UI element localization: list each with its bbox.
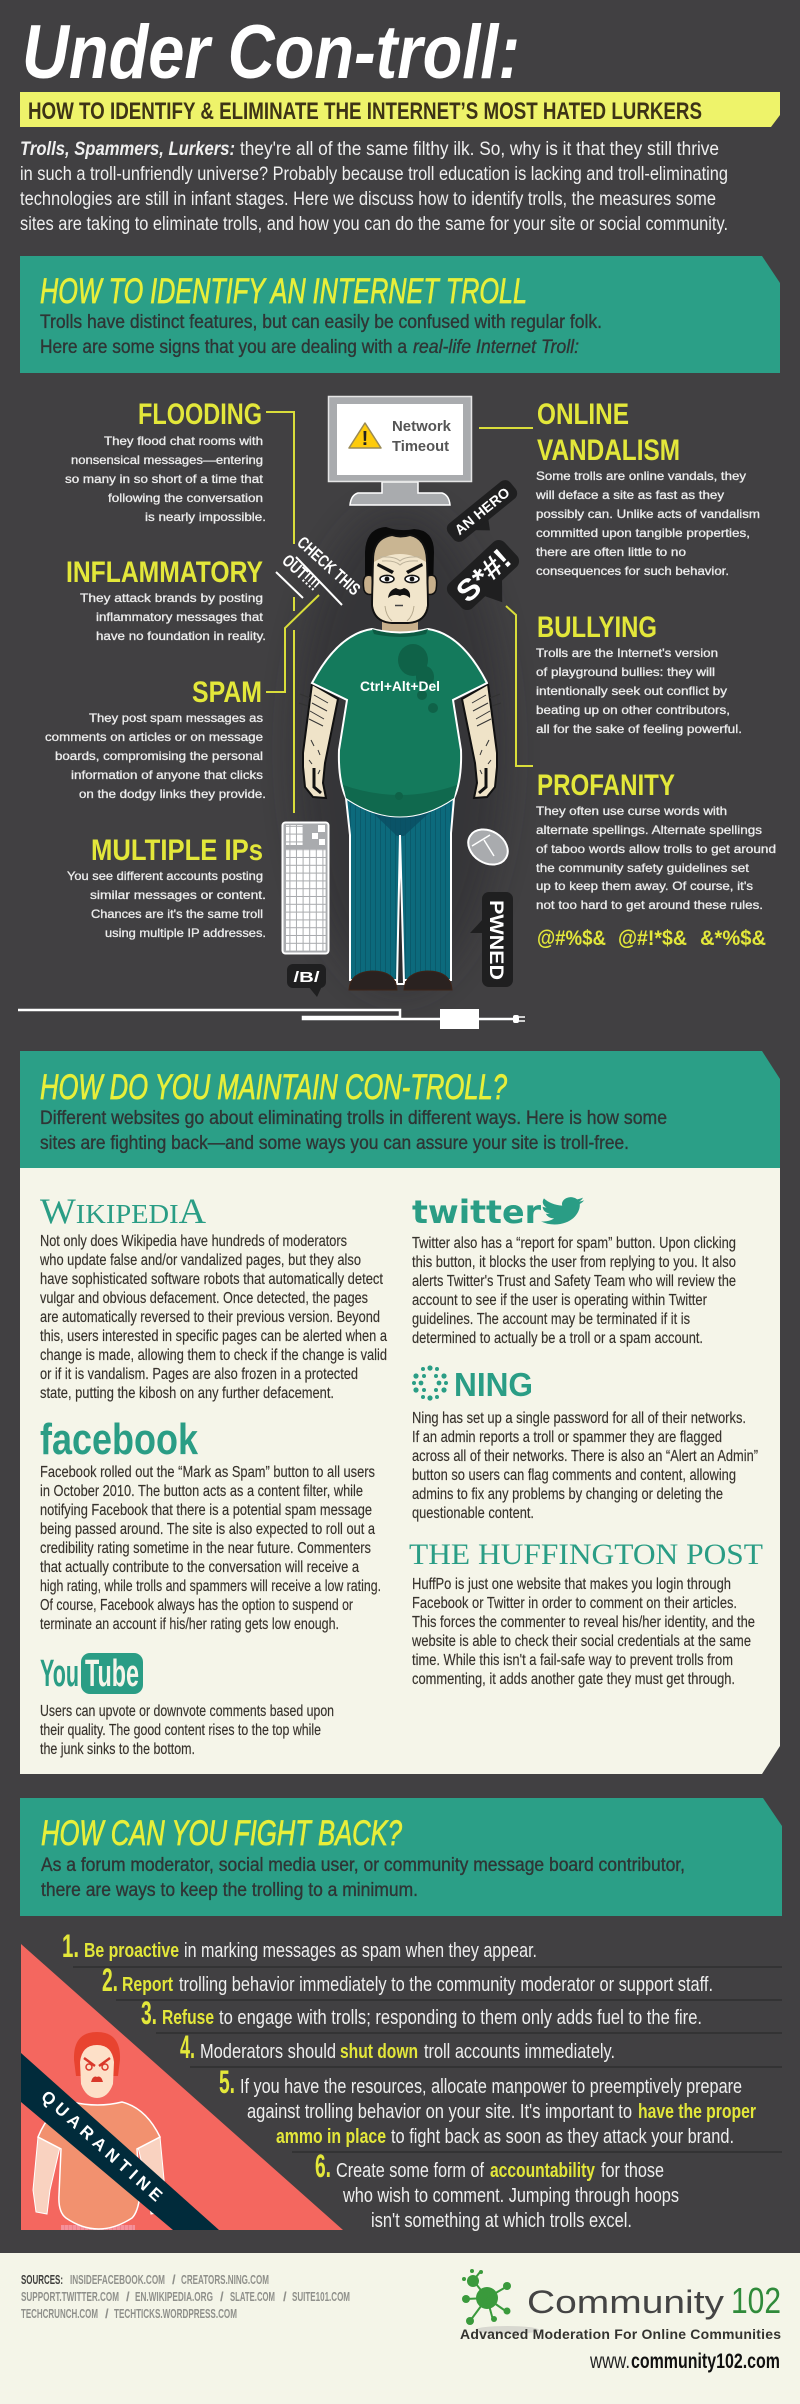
maintain intro text: [40, 1108, 667, 1154]
tip 6: Create some form of: [336, 2160, 484, 2182]
intro paragraph: they're all of the same filthy ilk. So, why is it that they still thrive: [240, 139, 719, 160]
block: youtube: the junk sinks to the bottom.: [40, 1741, 195, 1758]
icon: mouse: [462, 822, 514, 872]
quarantine band: [21, 2053, 219, 2230]
block: ning: NING: [454, 1366, 533, 1403]
sign: spam: on the dodgy links they provide.: [79, 787, 266, 801]
sign: profanity: @#%$&: [537, 927, 606, 950]
icon: monitor: Timeout: [392, 438, 449, 455]
block: wikipedia: state, putting the kibosh on any further defacement.: [40, 1385, 334, 1402]
tip 5: ammo in place: [276, 2126, 386, 2148]
block: huffington post: HuffPo is just one website that makes you login through: [412, 1576, 731, 1593]
tip 6: 6.: [315, 2148, 331, 2184]
fight back intro text: [41, 1855, 685, 1901]
block: ning: questionable content.: [412, 1505, 534, 1522]
sign: inflammatory: inflammatory messages that: [96, 610, 264, 624]
icon: mouse cable and adapter: [18, 1009, 525, 1029]
panel: footer: [0, 2253, 800, 2404]
identify intro text: Trolls have distinct features, but can easily be confused with regular folk.: [40, 312, 602, 333]
sign: bullying: BULLYING: [537, 611, 657, 644]
sign: multiple IPs: using multiple IP addresses.: [105, 926, 266, 940]
tip 2: Report: [122, 1974, 173, 1996]
sources: TECHTICKS.WORDPRESS.COM: [114, 2306, 237, 2321]
sign: spam: [45, 676, 266, 801]
panel: site approaches: [20, 1168, 780, 1774]
icon: warning triangle: !: [362, 428, 368, 450]
block: huffington post: time. While this isn't a fail-safe way to prevent trolls from: [412, 1652, 733, 1669]
sign: inflammatory: have no foundation in reality.: [96, 629, 266, 643]
sign: bullying: intentionally seek out conflict by: [536, 684, 727, 698]
block: facebook: Of course, Facebook always has the option to suspend or: [40, 1597, 354, 1614]
block: facebook: Facebook rolled out the “Mark as Spam” button to all users: [40, 1464, 375, 1481]
sign: flooding: FLOODING: [138, 398, 262, 431]
block: twitter: account to see if the user is operating within Twitter: [412, 1292, 708, 1309]
shirt stains: [395, 644, 438, 800]
bubble: check this out: OUT!!!!: [278, 551, 324, 594]
bubble: S*#!: [444, 537, 533, 625]
sign: inflammatory: INFLAMMATORY: [66, 556, 263, 589]
sources: /: [105, 2306, 109, 2321]
community 102 logo: [460, 2269, 781, 2342]
troll head: [363, 527, 437, 623]
heading: fight back: HOW CAN YOU FIGHT BACK?: [41, 1814, 402, 1853]
sign: profanity: [536, 769, 776, 950]
community 102 logo: Advanced Moderation For Online Communities: [460, 2326, 781, 2342]
heading: identify: HOW TO IDENTIFY AN INTERNET TROLL: [40, 272, 527, 311]
bubble: S*#!: S*#!: [450, 543, 518, 609]
tip 5: against trolling behavior on your site. It's important to: [247, 2101, 632, 2123]
community 102 logo: 102: [731, 2280, 781, 2321]
block: wikipedia: Not only does Wikipedia have hundreds of moderators: [40, 1233, 347, 1250]
sources: SLATE.COM: [230, 2289, 275, 2304]
troll neck: [382, 618, 418, 634]
tip 3: to engage with trolls; responding to them only adds fuel to the fire.: [219, 2007, 702, 2029]
tip 4: [180, 2029, 782, 2067]
icon: green splat: [462, 2269, 539, 2334]
bubble: an hero: AN HERO: [451, 484, 513, 538]
sign: online vandalism: VANDALISM: [537, 434, 680, 467]
sign: bullying: beating up on other contributors,: [536, 703, 730, 717]
fight back intro text: As a forum moderator, social media user, or community message board contributor,: [41, 1855, 685, 1876]
tip 3: Refuse: [162, 2007, 214, 2029]
block: ning: admins to fix any problems by changing or deleting the: [412, 1486, 723, 1503]
sources: SUITE101.COM: [292, 2289, 350, 2304]
icon: monitor: [328, 396, 472, 505]
block: facebook: [40, 1415, 381, 1633]
sources: TECHCRUNCH.COM: [21, 2306, 98, 2321]
block: twitter: determined to actually be a troll or a spam account.: [412, 1330, 703, 1347]
identify intro text: Here are some signs that you are dealing with a: [40, 337, 407, 358]
sign: online vandalism: consequences for such behavior.: [536, 564, 729, 578]
block: facebook: high rating, while trolls and spammers will receive a low rating.: [40, 1578, 381, 1595]
website address: www.: [589, 2350, 630, 2373]
sign: multiple IPs: [67, 834, 266, 940]
sign: profanity: &*%$&: [700, 927, 766, 950]
sign: profanity: @#!*$&: [618, 927, 687, 950]
sources: /: [283, 2289, 287, 2304]
icon: twitter bird: [541, 1197, 584, 1224]
sign: profanity: alternate spellings. Alternate spellings: [536, 823, 762, 837]
tip 3: 3.: [141, 1995, 157, 2031]
quarantine label: QUARANTINE: [37, 2087, 166, 2205]
tip 2: 2.: [102, 1962, 118, 1998]
intro paragraph: [20, 139, 728, 235]
illustration: troll character: [299, 527, 501, 990]
sign: flooding: following the conversation: [108, 491, 263, 505]
tip 6: for those: [601, 2160, 664, 2182]
block: twitter: this button, it blocks the user from replying to you. It also: [412, 1254, 736, 1271]
icon: keyboard: [282, 822, 328, 954]
panel: fight back header: [20, 1798, 782, 1916]
tip 6: accountability: [490, 2160, 596, 2182]
troll shirt: [312, 629, 487, 816]
bubble: an hero: [444, 477, 526, 552]
tip 5: [219, 2064, 782, 2152]
sign: bullying: of playground bullies: they will: [536, 665, 715, 679]
icon: warning triangle: [349, 423, 381, 450]
community 102 logo: Community: [527, 2284, 724, 2320]
sign: profanity: PROFANITY: [537, 769, 675, 802]
sources: /: [126, 2289, 130, 2304]
sign: online vandalism: there are often little to no: [536, 545, 686, 559]
sign: multiple IPs: You see different accounts posting: [67, 869, 263, 883]
tip 2: [102, 1962, 782, 2000]
tip 5: 5.: [219, 2064, 235, 2100]
connector lines: [266, 412, 533, 813]
sign: online vandalism: will deface a site as fast as they: [535, 488, 724, 502]
block: wikipedia: are automatically reversed to their previous version. Beyond: [40, 1309, 380, 1326]
tip 1: Be proactive: [84, 1940, 179, 1962]
sources: SUPPORT.TWITTER.COM: [21, 2289, 119, 2304]
sources: EN.WIKIPEDIA.ORG: [135, 2289, 213, 2304]
sign: spam: information of anyone that clicks: [71, 768, 263, 782]
bubble: /B/: [287, 964, 326, 997]
block: twitter: [412, 1193, 736, 1347]
panel: how do you maintain header: [20, 1051, 780, 1168]
sources: /: [172, 2272, 176, 2287]
sign: flooding: is nearly impossible.: [145, 510, 266, 524]
tip 4: troll accounts immediately.: [424, 2041, 615, 2063]
sign: spam: They post spam messages as: [89, 711, 263, 725]
sign: multiple IPs: Chances are it's the same troll: [91, 907, 263, 921]
block: ning: [412, 1365, 758, 1522]
identify intro text: real-life Internet Troll:: [413, 337, 579, 358]
tip 4: 4.: [180, 2029, 195, 2065]
block: wikipedia: this, users interested in specific pages can be alerted when a: [40, 1328, 387, 1345]
identify intro text: [40, 312, 602, 358]
block: youtube: [40, 1653, 334, 1758]
tip 3: [141, 1995, 782, 2033]
sign: flooding: [65, 398, 266, 524]
block: wikipedia: [39, 1191, 387, 1402]
illustration: quarantine triangle: [21, 1944, 343, 2230]
sign: online vandalism: possibly can. Unlike acts of vandalism: [536, 507, 760, 521]
sign: profanity: not too hard to get around these rules.: [536, 898, 763, 912]
block: youtube: Users can upvote or downvote comments based upon: [40, 1703, 334, 1720]
block: facebook: facebook: [40, 1415, 198, 1464]
troll arms: [299, 684, 501, 798]
sign: multiple IPs: MULTIPLE IPs: [91, 834, 263, 867]
block: wikipedia: who update false and/or vandalized pages, but they also: [39, 1252, 361, 1269]
sign: online vandalism: [535, 398, 760, 578]
icon: ning dots: [412, 1365, 448, 1401]
maintain intro text: Different websites go about eliminating trolls in different ways. Here is how some: [40, 1108, 667, 1129]
sign: flooding: They flood chat rooms with: [104, 434, 263, 448]
block: facebook: notifying Facebook that there is a potential spam message: [40, 1502, 372, 1519]
tip 1: [62, 1928, 782, 1967]
sign: multiple IPs: similar messages or content.: [90, 888, 266, 902]
sign: inflammatory: [66, 556, 266, 643]
block: wikipedia: change is made, allowing them to check if the change is valid: [40, 1347, 387, 1364]
tip 4: Moderators should: [200, 2041, 336, 2063]
sign: spam: SPAM: [192, 676, 262, 709]
troll legs: [346, 798, 454, 990]
tip 6: [315, 2148, 679, 2232]
block: facebook: in October 2010. The button acts as a content filter, while: [40, 1483, 363, 1500]
bubble: pwned: PWNED: [485, 900, 506, 980]
intro paragraph: Trolls, Spammers, Lurkers:: [20, 139, 235, 160]
block: facebook: that actually contribute to the conversation will receive a: [40, 1559, 359, 1576]
block: huffington post: THE HUFFINGTON POST: [409, 1538, 763, 1571]
heading: maintain: HOW DO YOU MAINTAIN CON-TROLL?: [40, 1068, 507, 1107]
bubble: check this out: [276, 533, 364, 605]
sign: online vandalism: Some trolls are online vandals, they: [536, 469, 746, 483]
block: huffington post: [409, 1538, 763, 1688]
sources: [21, 2272, 350, 2321]
block: wikipedia: have sophisticated software robots that automatically detect: [40, 1271, 383, 1288]
fight back intro text: there are ways to keep the trolling to a minimum.: [41, 1880, 418, 1901]
sign: bullying: [536, 611, 742, 736]
tip 1: in marking messages as spam when they appear.: [184, 1940, 537, 1962]
sign: bullying: Trolls are the Internet's version: [536, 646, 718, 660]
block: wikipedia: vulgar and obvious defacement. Once detected, the pages: [40, 1290, 368, 1307]
sign: profanity: up to keep them away. Of course, it's: [536, 879, 753, 893]
sources: CREATORS.NING.COM: [181, 2272, 269, 2287]
sign: bullying: all for the sake of feeling powerful.: [536, 722, 742, 736]
block: twitter: guidelines. The account may be terminated if it is: [412, 1311, 690, 1328]
tip 5: to fight back as soon as they attack your brand.: [391, 2126, 734, 2148]
sign: flooding: so many in so short of a time that: [65, 472, 264, 486]
tip 6: isn't something at which trolls excel.: [371, 2210, 632, 2232]
quarantined troll: [33, 2032, 165, 2230]
tip 4: shut down: [340, 2041, 418, 2063]
block: facebook: being passed around. The site is also expected to roll out a: [40, 1521, 375, 1538]
sign: online vandalism: ONLINE: [537, 398, 629, 431]
block: wikipedia: WIKIPEDIA: [40, 1191, 206, 1231]
sign: spam: comments on articles or on message: [45, 730, 263, 744]
maintain intro text: sites are fighting back—and some ways you can assure your site is troll-free.: [40, 1133, 629, 1154]
sign: inflammatory: They attack brands by posting: [80, 591, 263, 605]
sign: profanity: of taboo words allow trolls to get around: [536, 842, 776, 856]
sources: /: [220, 2289, 224, 2304]
sources: SOURCES:: [21, 2272, 63, 2287]
sign: profanity: They often use curse words with: [536, 804, 727, 818]
block: youtube: Tube: [85, 1653, 139, 1695]
shadow behind troll: [295, 510, 505, 990]
block: youtube: their quality. The good content rises to the top while: [40, 1722, 321, 1739]
sign: online vandalism: committed upon tangible properties,: [536, 526, 750, 540]
title: Under Con-troll:: [22, 10, 520, 95]
tip 6: who wish to comment. Jumping through hoops: [342, 2185, 679, 2207]
bubble: /B/: /B/: [294, 969, 321, 986]
bubble: pwned: [470, 892, 513, 987]
sign: profanity: the community safety guidelines set: [536, 861, 750, 875]
block: wikipedia: or if it is vandalism. Pages are also frozen in a protected: [40, 1366, 358, 1383]
panel: how to identify header: [20, 256, 780, 373]
tip 5: have the proper: [638, 2101, 756, 2123]
block: ning: If an admin reports a troll or spammer they are flagged: [412, 1429, 722, 1446]
icon: monitor: Network: [392, 418, 452, 435]
block: twitter: twitter: [412, 1193, 541, 1231]
sign: flooding: nonsensical messages—entering: [71, 453, 263, 467]
sources: INSIDEFACEBOOK.COM: [70, 2272, 165, 2287]
tip 1: 1.: [62, 1928, 79, 1964]
sign: spam: boards, compromising the personal: [55, 749, 263, 763]
bubble: check this out: CHECK THIS: [293, 533, 364, 599]
block: youtube: You: [40, 1653, 79, 1695]
block: facebook: credibility rating sometime in the near future. Commenters: [40, 1540, 371, 1557]
block: facebook: terminate an account if his/her rating gets low enough.: [40, 1616, 339, 1633]
shirt slogan: Ctrl+Alt+Del: [360, 678, 440, 694]
